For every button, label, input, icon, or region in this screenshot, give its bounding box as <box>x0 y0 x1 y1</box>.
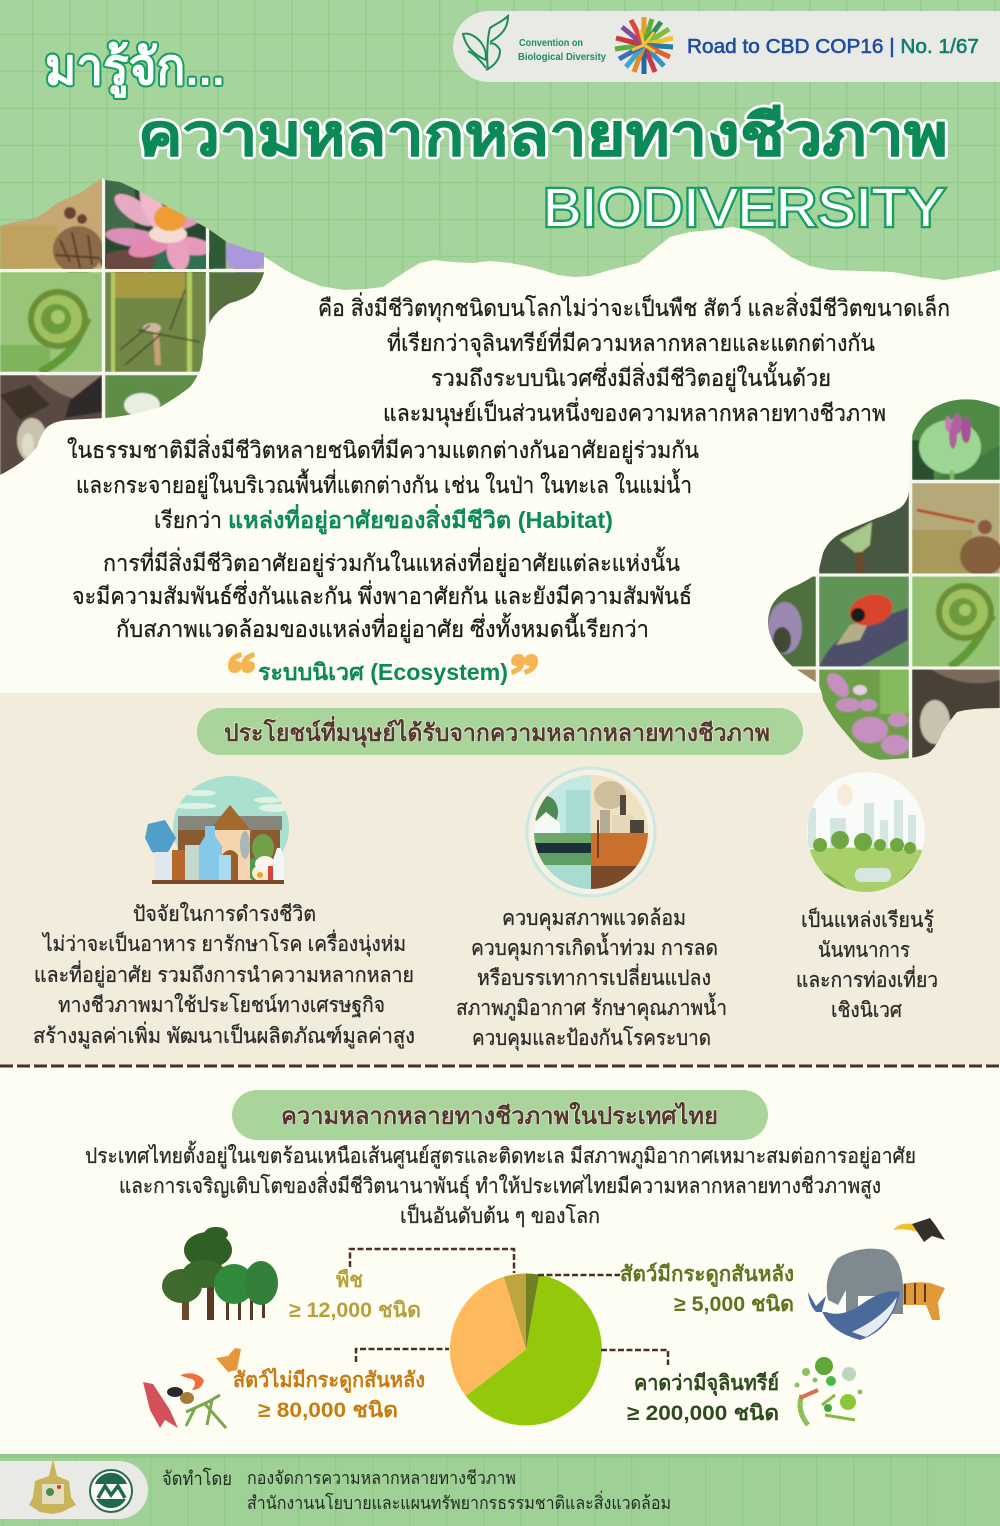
label: plants: พืช <box>336 1268 363 1292</box>
benefit text: environment: สภาพภูมิอากาศ รักษาคุณภาพน้ำ <box>456 993 727 1021</box>
icon: elephant <box>827 1249 903 1314</box>
benefit text: environment <box>456 907 727 1051</box>
photo collage: top left <box>0 170 270 480</box>
photo: leaf with buds <box>912 398 1000 480</box>
icon: closing quote <box>511 654 538 675</box>
photo: snail <box>0 375 102 475</box>
ecosystem text block: การที่มีสิ่งมีชีวิตอาศัยอยู่ร่วมกันในแหล่งที่อยู่อาศัยแต่ละแห่งนั้น <box>103 547 680 577</box>
photo: lilac flower <box>767 576 816 667</box>
footer credit text: กองจัดการความหลากหลายทางชีวภาพ <box>247 1468 516 1488</box>
pie chart <box>450 1273 602 1425</box>
background: green grid paper header <box>0 0 1000 320</box>
icon: shrimp <box>180 1373 204 1390</box>
benefit text: recreation <box>796 906 938 1022</box>
photo: leaf shadow <box>208 272 264 326</box>
icon: hornbill <box>893 1218 945 1242</box>
icon: opening quote <box>228 652 255 673</box>
photo: dry stem <box>796 668 816 682</box>
torn paper panel <box>0 227 1000 700</box>
benefit text: livelihood <box>33 902 415 1049</box>
photo collage: right side <box>760 398 1000 762</box>
icon: city park <box>807 772 925 892</box>
title: intro word: มารู้จัก... <box>45 39 225 97</box>
ecosystem text block <box>72 547 692 643</box>
photo: wild orchid <box>819 669 909 760</box>
heading pill: biodiversity in Thailand: ความหลากหลายทางชีวภาพในประเทศไทย <box>281 1101 718 1130</box>
footer credit text <box>162 1467 671 1513</box>
benefit text: environment: ควบคุมการเกิดน้ำท่วม การลด <box>471 933 718 961</box>
title: Thai main heading: ความหลากหลายทางชีวภาพ <box>138 103 948 168</box>
label: microorganisms: คาดว่ามีจุลินทรีย์ <box>634 1371 779 1397</box>
icon: CBD leaf logo <box>463 16 508 70</box>
intro text block: รวมถึงระบบนิเวศซึ่งมีสิ่งมีชีวิตอยู่ในนั้นด้วย <box>431 362 831 392</box>
icon: mussels <box>167 1387 194 1404</box>
CBD logo text <box>518 37 606 63</box>
benefit text: recreation: เชิงนิเวศ <box>831 999 903 1022</box>
label: microorganisms <box>627 1371 779 1425</box>
icon: whale <box>808 1291 900 1340</box>
collage gaps <box>0 178 264 418</box>
Thailand text block: ประเทศไทยตั้งอยู่ในเขตร้อนเหนือเส้นศูนย์สูตรและติดทะเล มีสภาพภูมิอากาศเหมาะสมต่อการอยู่อาศัย <box>85 1141 916 1169</box>
icon: COP16 flower logo <box>615 17 673 74</box>
collage gaps <box>792 436 1000 758</box>
Thailand text block <box>85 1141 916 1228</box>
icon: ministry emblem <box>29 1459 76 1514</box>
benefit text: livelihood: ไม่ว่าจะเป็นอาหาร ยารักษาโรค เครื่องนุ่งห่ม <box>41 929 406 957</box>
section divider <box>0 1064 1000 1068</box>
photo: crane fly <box>105 272 206 372</box>
benefit text: livelihood: สร้างมูลค่าเพิ่ม พัฒนาเป็นผลิตภัณฑ์มูลค่าสูง <box>33 1021 415 1049</box>
intro text block <box>318 292 950 427</box>
CBD logo text: Biological Diversity <box>518 51 606 63</box>
chart connectors <box>350 1249 668 1365</box>
footer credit text: สำนักงานนโยบายและแผนทรัพยากรธรรมชาติและสิ่งแวดล้อม <box>247 1490 671 1513</box>
photo: pale leaf <box>819 483 909 574</box>
photo: dragonfly <box>912 483 1000 576</box>
benefit text: livelihood: และที่อยู่อาศัย รวมถึงการนำความหลากหลาย <box>34 960 414 988</box>
Thailand text block: เป็นอันดับต้น ๆ ของโลก <box>400 1202 600 1228</box>
benefit text: recreation: นันทนาการ <box>818 939 910 962</box>
label: invertebrates: ≥ 80,000 ชนิด <box>258 1399 398 1422</box>
photo: fern <box>912 576 1000 667</box>
icon: ONEP emblem <box>90 1470 132 1512</box>
photo: feather on green <box>105 374 198 418</box>
Thailand text block: และการเจริญเติบโตของสิ่งมีชีวิตนานาพันธุ์ ทำให้ประเทศไทยมีความหลากหลายทางชีวภาพสูง <box>119 1171 881 1199</box>
series title: Road to CBD COP16 | No. 1/67 <box>687 35 979 58</box>
heading pill: biodiversity in Thailand <box>232 1090 768 1140</box>
benefit text: recreation: และการท่องเที่ยว <box>796 965 938 992</box>
benefit text: environment: ควบคุมและป้องกันโรคระบาด <box>472 1026 711 1051</box>
footer band <box>0 1454 1000 1526</box>
header logo pill <box>453 11 1000 82</box>
habitat text block: แหล่งที่อยู่อาศัยของสิ่งมีชีวิต (Habitat) <box>228 503 613 535</box>
icon: livelihood goods and house <box>145 776 291 884</box>
icon: elephant tiger whale <box>808 1249 945 1340</box>
benefit text: livelihood: ปัจจัยในการดำรงชีวิต <box>133 902 316 926</box>
heading pill: benefits: ประโยชน์ที่มนุษย์ได้รับจากความหลากหลายทางชีวภาพ <box>224 715 770 749</box>
habitat text block: และกระจายอยู่ในบริเวณพื้นที่แตกต่างกัน เช่น ในป่า ในทะเล ในแม่น้ำ <box>76 469 692 499</box>
benefit text: environment: ควบคุมสภาพแวดล้อม <box>502 907 686 931</box>
benefit text: recreation: เป็นแหล่งเรียนรู้ <box>801 906 934 933</box>
panel: lower paper area <box>0 1065 1000 1455</box>
ecosystem callout <box>228 652 538 685</box>
label: vertebrates: ≥ 5,000 ชนิด <box>674 1293 794 1316</box>
benefit text: environment: หรือบรรเทาการเปลี่ยนแปลง <box>477 963 711 990</box>
footer credit text: จัดทำโดย <box>162 1467 232 1490</box>
intro text block: และมนุษย์เป็นส่วนหนึ่งของความหลากหลายทางชีวภาพ <box>383 397 886 427</box>
ecosystem callout: ระบบนิเวศ (Ecosystem) <box>258 659 508 685</box>
ecosystem text block: กับสภาพแวดล้อมของแหล่งที่อยู่อาศัย ซึ่งทั้งหมดนี้เรียกว่า <box>116 613 649 643</box>
intro text block: ที่เรียกว่าจุลินทรีย์ที่มีความหลากหลายและแตกต่างกัน <box>387 327 875 357</box>
label: invertebrates: สัตว์ไม่มีกระดูกสันหลัง <box>233 1367 425 1394</box>
photo: snail <box>912 669 1000 760</box>
label: vertebrates: สัตว์มีกระดูกสันหลัง <box>620 1262 794 1288</box>
ecosystem text block: จะมีความสัมพันธ์ซึ่งกันและกัน พึ่งพาอาศัยกัน และยังมีความสัมพันธ์ <box>72 580 692 609</box>
icon: microorganisms <box>794 1357 862 1425</box>
title: BIODIVERSITY: BIODIVERSITY <box>543 178 945 238</box>
icon: trees <box>162 1227 278 1320</box>
photo: ladybug <box>819 576 909 667</box>
label: microorganisms: ≥ 200,000 ชนิด <box>627 1402 779 1425</box>
photo: purple flower <box>208 229 264 273</box>
photo: dragonfly on seed head <box>0 170 103 274</box>
icon: mantis <box>186 1395 226 1428</box>
icon: butterfly <box>216 1348 241 1372</box>
photo: fern <box>0 272 102 372</box>
habitat text block <box>67 434 699 535</box>
CBD logo text: Convention on <box>519 37 583 49</box>
intro text block: คือ สิ่งมีชีวิตทุกชนิดบนโลกไม่ว่าจะเป็นพืช สัตว์ และสิ่งมีชีวิตขนาดเล็ก <box>318 292 950 322</box>
label: invertebrates <box>233 1367 425 1422</box>
habitat text block: ในธรรมชาติมีสิ่งมีชีวิตหลายชนิดที่มีความแตกต่างกันอาศัยอยู่ร่วมกัน <box>67 434 699 464</box>
icon: squid <box>143 1382 178 1428</box>
panel: benefits beige band <box>0 693 1000 1065</box>
benefit text: livelihood: ทางชีวภาพมาใช้ประโยชน์ทางเศรษฐกิจ <box>58 993 385 1017</box>
footer logo pill <box>0 1459 148 1519</box>
label: plants: ≥ 12,000 ชนิด <box>289 1299 421 1322</box>
title: intro word: มารู้จัก... <box>45 39 225 97</box>
icon: invertebrates <box>143 1348 241 1428</box>
label: plants <box>289 1268 421 1322</box>
label: vertebrates <box>620 1262 794 1316</box>
icon: tiger <box>884 1282 945 1320</box>
icon: environment control <box>527 768 655 896</box>
heading pill: benefits <box>197 708 803 755</box>
title: Thai main heading: ความหลากหลายทางชีวภาพ <box>138 103 948 168</box>
habitat text block: เรียกว่า <box>154 507 222 533</box>
photo: lotus <box>99 180 214 274</box>
